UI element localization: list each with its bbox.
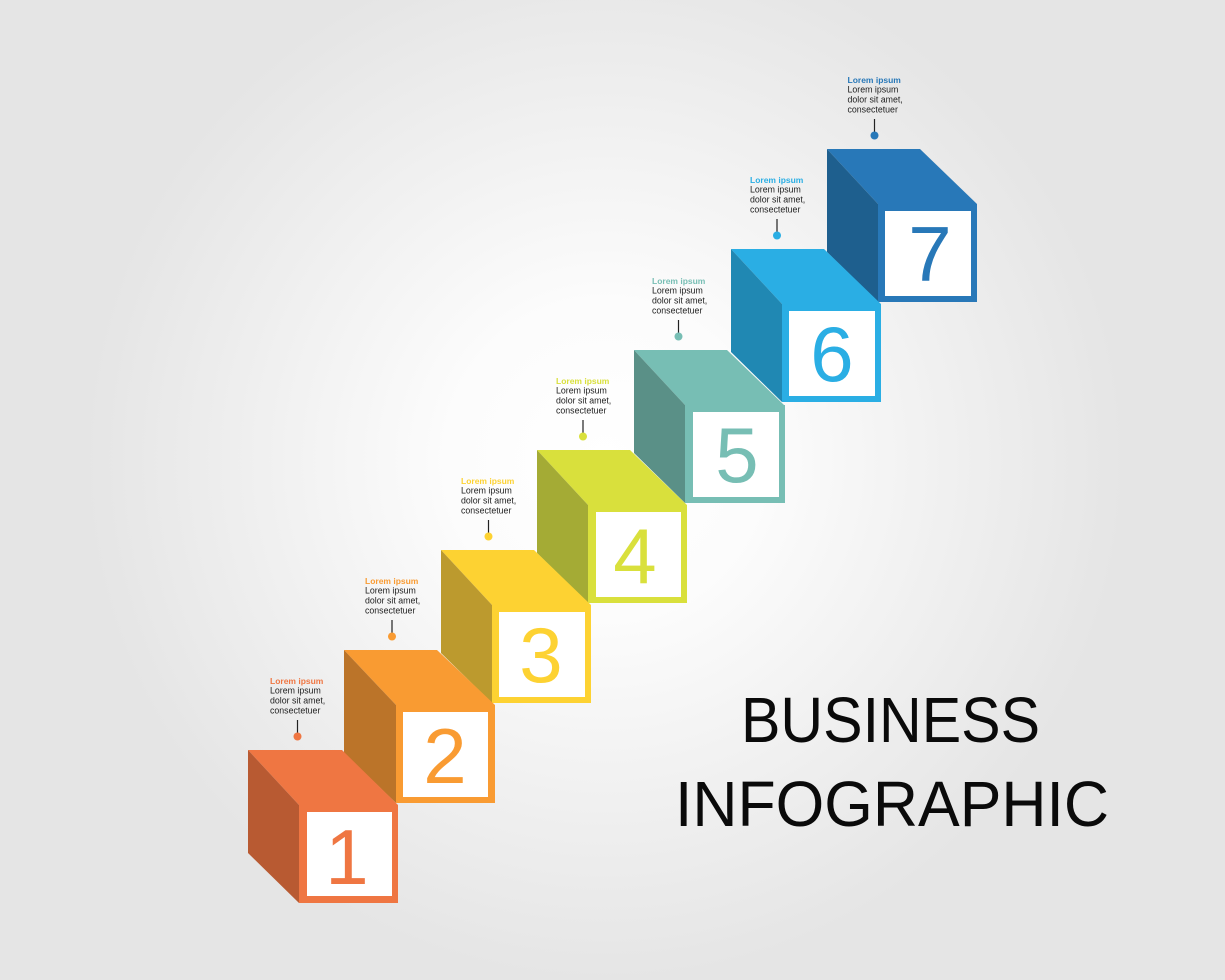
step 1 block	[248, 750, 398, 903]
label 4: Lorem ipsum	[556, 376, 610, 386]
number 3: 3	[519, 611, 563, 699]
label 1: dolor sit amet,	[270, 696, 325, 706]
step 3 block	[441, 550, 591, 703]
label 6: dolor sit amet,	[750, 194, 805, 204]
number 6: 6	[810, 310, 854, 398]
label 7: Lorem ipsum	[848, 84, 898, 94]
label 6: consectetuer	[750, 204, 800, 214]
number 4: 4	[613, 512, 657, 600]
label 3: Lorem ipsum	[461, 486, 512, 496]
label 3	[461, 476, 516, 540]
number 2: 2	[423, 712, 467, 800]
label 7: consectetuer	[848, 104, 898, 114]
label 1: consectetuer	[270, 706, 320, 716]
label 6: Lorem ipsum	[750, 175, 804, 185]
label 7: Lorem ipsum	[848, 75, 901, 85]
label 4	[556, 376, 611, 440]
label 2: Lorem ipsum	[365, 576, 419, 586]
step 6 block	[731, 249, 881, 402]
number 5: 5	[715, 411, 759, 499]
number 7: 7	[908, 210, 952, 298]
step 5 block	[634, 350, 785, 503]
label 2: dolor sit amet,	[365, 596, 420, 606]
step 2 block	[344, 650, 495, 803]
label 5: dolor sit amet,	[652, 296, 707, 306]
title: INFOGRAPHIC	[675, 768, 1109, 840]
label 4: dolor sit amet,	[556, 396, 611, 406]
label 3: dolor sit amet,	[461, 496, 516, 506]
step 7 block	[827, 149, 977, 302]
label 3: Lorem ipsum	[461, 476, 515, 486]
label 1: Lorem ipsum	[270, 676, 324, 686]
title	[675, 684, 1109, 840]
label 5: Lorem ipsum	[652, 276, 706, 286]
label 4: Lorem ipsum	[556, 386, 607, 396]
label 5	[652, 276, 707, 340]
label 1	[270, 676, 325, 740]
label 2: Lorem ipsum	[365, 586, 416, 596]
label 7	[848, 75, 903, 140]
number 1: 1	[325, 813, 369, 901]
label 7: dolor sit amet,	[848, 94, 903, 104]
label 4: consectetuer	[556, 406, 606, 416]
step 4 block	[537, 450, 687, 603]
label 5: consectetuer	[652, 306, 702, 316]
label 1: Lorem ipsum	[270, 686, 321, 696]
label 6	[750, 175, 805, 240]
title: BUSINESS	[741, 684, 1040, 756]
label 6: Lorem ipsum	[750, 184, 801, 194]
label 5: Lorem ipsum	[652, 286, 703, 296]
label 3: consectetuer	[461, 506, 511, 516]
label 2	[365, 576, 420, 640]
label 2: consectetuer	[365, 606, 415, 616]
